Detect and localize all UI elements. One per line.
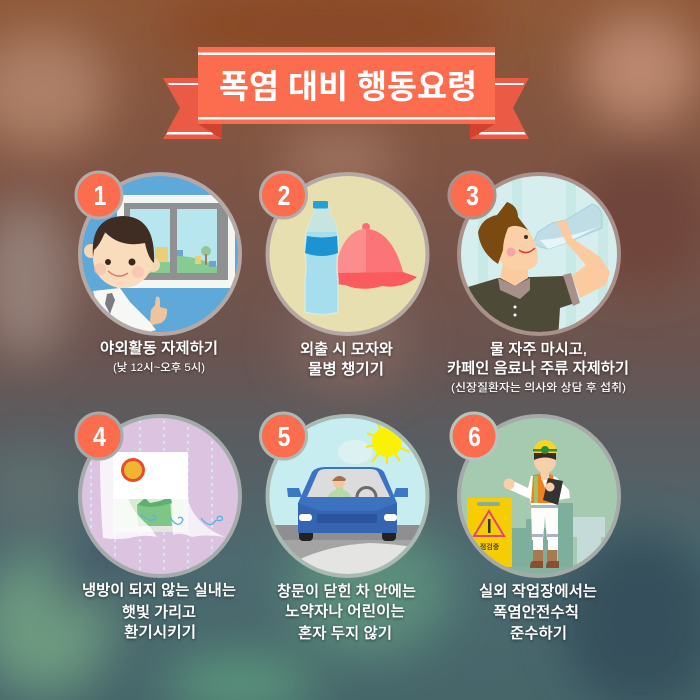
- badges: [76, 172, 497, 459]
- head: [498, 223, 538, 270]
- caption 6: 준수하기: [510, 625, 567, 642]
- badge 5: 5: [278, 422, 290, 453]
- neck and collar: [500, 264, 528, 286]
- badge 1: 1: [94, 181, 106, 212]
- panel 4: curtains and ventilation: [80, 416, 240, 580]
- illustration: window with curtains: [91, 420, 225, 580]
- caution sign: 점검중: [480, 542, 500, 551]
- worker: [504, 440, 570, 568]
- circle frame: [80, 416, 240, 576]
- caption 5: 창문이 닫힌 차 안에는: [277, 583, 416, 600]
- caption 4: 냉방이 되지 않는 실내는: [82, 582, 236, 599]
- illustration: car on the road: [275, 424, 420, 574]
- illustration: hat: [317, 223, 417, 289]
- panel 6: outdoor worker: [459, 416, 619, 579]
- right ribbon tail: [470, 78, 529, 139]
- caption 5: [277, 583, 416, 642]
- badge 2: 2: [278, 181, 290, 212]
- caption 1: (낮 12시~오후 5시): [113, 361, 205, 374]
- caption 2: 물병 챙기기: [308, 361, 384, 378]
- illustration: man by the window: [84, 195, 235, 336]
- caption 4: 환기시키기: [124, 624, 196, 641]
- circle frame: [459, 174, 619, 334]
- car: [287, 467, 408, 541]
- illustration: worker and sign: [467, 440, 605, 579]
- badge 6: 6: [468, 422, 481, 453]
- sun: [366, 424, 410, 464]
- left ribbon tail: [163, 78, 222, 139]
- bottle: [533, 204, 602, 249]
- circle frame: [459, 416, 619, 576]
- caption 2: [300, 341, 393, 378]
- badge 5: [260, 413, 306, 459]
- caption 1: [100, 340, 218, 374]
- panel 3: drinking water: [459, 170, 619, 340]
- caption 3: 카페인 음료나 주류 자제하기: [447, 360, 629, 377]
- caption 4: [82, 582, 236, 641]
- title ribbon: [163, 47, 529, 139]
- title text: 폭염 대비 행동요령: [219, 68, 477, 105]
- caption 4: 햇빛 가리고: [122, 604, 196, 621]
- panel 2: hat and water bottle: [268, 174, 428, 334]
- ribbon main panel: [198, 47, 495, 124]
- caption 1: 야외활동 자제하기: [100, 340, 218, 357]
- badge 3: [449, 172, 495, 218]
- caption 6: 실외 작업장에서는: [479, 583, 597, 600]
- badge 4: [76, 413, 122, 459]
- badge 2: [260, 172, 306, 218]
- caption 3: (신장질환자는 의사와 상담 후 섭취): [451, 381, 626, 394]
- badge 1: [76, 172, 122, 218]
- caption 3: 물 자주 마시고,: [490, 341, 587, 358]
- arm: [556, 220, 610, 298]
- caption 6: 폭염안전수칙: [493, 604, 579, 621]
- caption 6: [479, 583, 597, 642]
- caption 3: [447, 341, 629, 394]
- illustration: man drinking: [468, 170, 610, 340]
- illustration: water bottle: [305, 201, 338, 314]
- panel 1: stay indoors: [80, 174, 240, 336]
- badge 6: [451, 413, 497, 459]
- circle frame: [268, 174, 428, 334]
- caption 5: 혼자 두지 않기: [298, 625, 392, 642]
- caption 5: 노약자나 어린이는: [285, 603, 405, 620]
- shirt: [468, 276, 572, 332]
- circle frame: [268, 416, 428, 576]
- caption 2: 외출 시 모자와: [300, 341, 393, 358]
- circle frame: [80, 174, 240, 334]
- badge 3: 3: [466, 181, 479, 212]
- badge 4: 4: [93, 422, 107, 453]
- panel 5: car: [265, 416, 430, 590]
